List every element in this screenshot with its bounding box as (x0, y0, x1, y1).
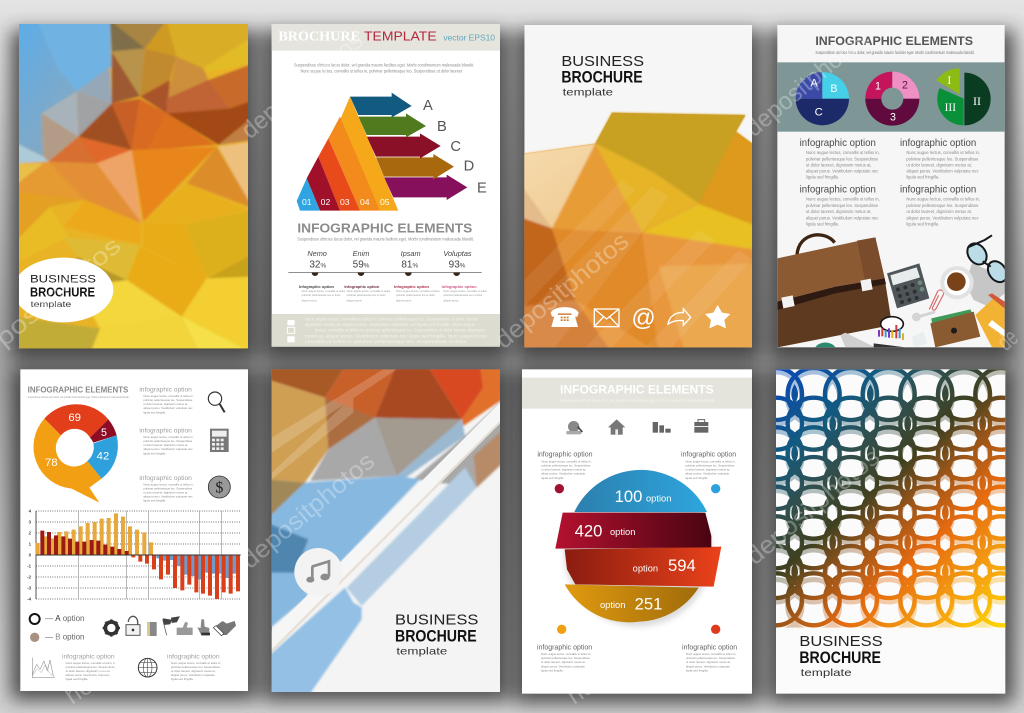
heading subtext: Suspendisse ultricies lacus dolor, vel gravida mauris facilisis eget. Morbi condimentum malesuada blandit. (560, 398, 715, 403)
watermarks: depositphotos (490, 227, 634, 355)
watermarks: hotos (562, 653, 627, 710)
icon: music note circle (294, 548, 342, 596)
four small options: aliquet purus (302, 298, 318, 302)
speech bubble donut chart: 69 (68, 412, 81, 424)
side option texts: pulvinar pellentesque leo. Suspendisse (143, 486, 193, 490)
brochure title: BUSINESS (395, 611, 478, 628)
four option blocks: infographic option (682, 644, 737, 651)
pyramid slabs: 02 (321, 197, 330, 207)
heading subtext: Suspendisse ultricies lacus dolor, vel gravida mauris facilisis eget. Morbi condimentum malesuada blandit. (28, 395, 130, 399)
four small options: aliquet purus (443, 298, 459, 302)
bar chart: 4 (29, 509, 32, 514)
four small options: pulvinar pellentesque leo ut dolor (347, 293, 386, 297)
panel: circular ribbon infographic (522, 369, 752, 694)
option blocks: infographic option (800, 138, 876, 149)
pie chart roman numerals: II (973, 94, 981, 108)
four option blocks: aliquet purus. Vestibulum vulputate (541, 472, 586, 476)
percent stats: Voluptas (443, 249, 472, 258)
four small options: Infographic option (442, 284, 477, 289)
intro text (294, 62, 474, 74)
four option blocks: aliquet purus. Vestibulum vulputate (686, 664, 730, 668)
option blocks (800, 138, 980, 226)
mini line chart (32, 658, 55, 678)
option blocks: infographic option (900, 185, 976, 196)
bottom option right: pulvinar pellentesque leo. Suspendisse (171, 665, 220, 669)
four option blocks: ligula sed fringilla. (686, 669, 709, 673)
pyramid slabs: 03 (340, 197, 350, 207)
percent stats: 32% (309, 260, 326, 271)
panel: orange polygon brochure (519, 25, 759, 353)
option blocks: pulvinar pellentesque leo. Suspendisse (806, 203, 879, 208)
option blocks: pulvinar pellentesque leo. Suspendisse (906, 203, 979, 208)
pie chart ABC (796, 72, 849, 125)
four option blocks: ligula sed fringilla. (685, 476, 708, 480)
bottom option right: aliquet purus. Vestibulum vulputate (171, 673, 215, 677)
four option blocks: aliquet purus. Vestibulum vulputate (541, 664, 585, 668)
icon: dollar coin: $ (215, 480, 223, 497)
bottom option left: ut dolor laoreet, dignissim metus at, (66, 669, 111, 673)
speech bubble donut chart: 5 (101, 427, 107, 439)
panel: pyramid brochure (272, 24, 500, 347)
icon: key (912, 311, 935, 321)
option blocks: ut dolor laoreet, dignissim metus at, (906, 162, 972, 167)
ribbon circle chart (555, 470, 721, 622)
bottom option right: ligula sed fringilla. (171, 677, 194, 681)
percent stats: 59% (353, 260, 370, 271)
option blocks: Nunc augue lectus, convallis ut tellus in, (806, 150, 880, 155)
four option blocks: ut dolor laoreet, dignissim metus at, (686, 660, 731, 664)
option blocks: aliquet purus. Vestibulum vulputate nec (906, 169, 979, 174)
speech bubble donut chart: 78 (45, 457, 58, 469)
four option blocks (537, 452, 737, 673)
watermarks: depositphotos (236, 447, 380, 575)
option blocks: pulvinar pellentesque leo. Suspendisse (906, 156, 979, 161)
four option blocks: pulvinar pellentesque leo. Suspendisse (685, 463, 735, 467)
brochure title: template (801, 668, 852, 679)
option blocks: ut dolor laoreet, dignissim metus at, (806, 162, 872, 167)
side option texts: aliquet purus. Vestibulum vulputate nec (143, 494, 193, 498)
four option blocks: pulvinar pellentesque leo. Suspendisse (686, 656, 735, 660)
four option blocks: ligula sed fringilla. (541, 669, 564, 673)
pyramid slabs (297, 97, 398, 211)
arrow letters: B (437, 119, 447, 135)
brochure title: BUSINESS (561, 53, 644, 70)
arrow letters (423, 98, 487, 196)
four small options (299, 284, 488, 302)
brochure title: template (396, 646, 448, 657)
icon: charts and papers (815, 317, 927, 347)
four option blocks: Nunc augue lectus, convallis ut tellus in, (686, 652, 736, 656)
ring shadow layer (776, 370, 1006, 628)
header title: TEMPLATE (364, 29, 437, 44)
icon: wallet (930, 309, 980, 347)
bottom option left: pulvinar pellentesque leo. Suspendisse (66, 665, 115, 669)
icon: telephone (551, 307, 579, 327)
icon: case (694, 420, 708, 433)
icon: envelope (594, 309, 619, 327)
side option texts: ut dolor laoreet, dignissim metus at, (143, 490, 188, 494)
cover title ellipse: BROCHURE (30, 285, 95, 300)
side option texts: Nunc augue lectus, convallis ut tellus in, (143, 394, 194, 398)
percent stats: 93% (449, 260, 466, 271)
brochure title (561, 53, 644, 99)
bottom option right: ut dolor laoreet, dignissim metus at, (171, 669, 216, 673)
speech bubble donut chart (33, 404, 118, 503)
icon: star (705, 305, 730, 328)
four small options: pulvinar pellentesque leo ut dolor (302, 293, 341, 297)
icon: paperclip (929, 290, 944, 310)
footer band: dignissim metus at, aliquet purus. Vestibulum vulputate nec ligula sed fringilla. Nunc augue (305, 322, 476, 327)
brochure title: BROCHURE (395, 626, 477, 645)
side option texts: ut dolor laoreet, dignissim metus at, (143, 443, 188, 447)
section subtext: Suspendisse ultricies lacus dolor, vel gravida mauris facilisis eget. Morbi condimentum malesuada blandit. (297, 236, 474, 241)
footer band: convallis ut tellus in, pulvinar pellentesque leo. Suspendisse ut dolor (305, 339, 467, 344)
bottom option right: Nunc augue lectus, convallis ut tellus in, (171, 661, 221, 665)
ribbon circle chart: 100 (615, 487, 642, 506)
four option blocks: infographic option (681, 452, 736, 459)
side option texts: Nunc augue lectus, convallis ut tellus in, (143, 482, 194, 486)
option blocks: aliquet purus. Vestibulum vulputate nec (806, 215, 878, 220)
brochure title: template (563, 88, 613, 99)
percent stats: 81% (401, 260, 418, 271)
cover title ellipse: template (31, 299, 72, 309)
legend (30, 614, 85, 642)
subtitle: Suspendisse ultricies lacus dolor, vel gravida mauris facilisis eget. Morbi condimentum malesuada blandit. (815, 50, 975, 55)
pyramid slabs: 01 (302, 197, 312, 207)
side option texts: ligula sed fringilla. (143, 410, 166, 414)
icon: briefcase (777, 235, 892, 347)
option blocks: Nunc augue lectus, convallis ut tellus in, (906, 150, 980, 155)
four small options: Infographic option (394, 284, 430, 289)
interlaced ring layer (776, 369, 1006, 628)
ribbon circle chart: option (610, 527, 635, 537)
side option texts (139, 387, 194, 503)
side option texts: ligula sed fringilla. (143, 499, 166, 503)
ribbon shadow (564, 479, 712, 627)
bottom option right (167, 654, 221, 681)
watermarks: depositphotos (740, 25, 873, 143)
brochure title: BUSINESS (799, 633, 883, 650)
four option blocks: pulvinar pellentesque leo. Suspendisse (541, 463, 591, 467)
icon: bar blocks (653, 422, 671, 433)
option blocks: aliquet purus. Vestibulum vulputate nec (806, 169, 878, 174)
option blocks: infographic option (800, 185, 876, 196)
pie chart ABC: C (815, 107, 823, 119)
four option blocks: aliquet purus. Vestibulum vulputate (685, 472, 730, 476)
heading: INFOGRAPHIC ELEMENTS (560, 383, 714, 397)
pie chart roman numerals (936, 68, 991, 125)
bottom option left: aliquet purus. Vestibulum vulputate (66, 673, 110, 677)
bar chart: -1 (27, 564, 32, 569)
bar chart: -2 (27, 575, 32, 580)
side option texts: ut dolor laoreet, dignissim metus at, (143, 402, 188, 406)
icon: calculator (887, 263, 929, 308)
header title: BROCHURE (278, 29, 360, 44)
four small options: Nunc augue lectus, convallis ut tellus (396, 289, 440, 293)
side option texts: aliquet purus. Vestibulum vulputate nec (143, 406, 193, 410)
four option blocks: infographic option (537, 452, 593, 459)
four small options: aliquet purus (347, 298, 363, 302)
percent stats (288, 249, 482, 276)
brochure title: BROCHURE (561, 68, 643, 87)
percent stats: Enim (353, 249, 369, 258)
four small options: Nunc augue lectus, convallis ut tellus (347, 289, 391, 293)
bar chart: 2 (29, 531, 32, 536)
icon: dollar coin (208, 476, 230, 498)
pie chart ABC: A (810, 78, 818, 90)
section heading: INFOGRAPHIC ELEMENTS (297, 221, 472, 235)
donut chart 123 (865, 72, 919, 126)
cover title ellipse: BUSINESS (30, 274, 97, 286)
bottom option right: infographic option (167, 654, 220, 661)
option blocks: ligula sed fringilla. (806, 175, 839, 180)
option blocks: pulvinar pellentesque leo. Suspendisse (806, 156, 879, 161)
bar chart: -4 (27, 597, 32, 602)
ribbon circle chart: 594 (668, 556, 696, 575)
percent stats: Nemo (307, 249, 327, 258)
ribbon circle chart: option (646, 493, 671, 503)
four option blocks: Nunc augue lectus, convallis ut tellus in, (685, 459, 736, 463)
footer band: Nunc augue lectus, convallis ut tellus in, pulvinar pellentesque leo. Suspendisse ut dolor laoreet (305, 317, 479, 322)
brochure title: BROCHURE (799, 648, 881, 667)
speech bubble donut chart: 42 (97, 450, 109, 462)
pie chart ABC: B (830, 83, 837, 95)
bar chart: -3 (27, 586, 32, 591)
option blocks: ligula sed fringilla. (806, 221, 839, 226)
side option texts: infographic option (139, 387, 192, 394)
pie band (777, 62, 1005, 132)
four small options: pulvinar pellentesque leo ut dolor (396, 293, 435, 297)
four option blocks: ut dolor laoreet, dignissim metus at, (541, 467, 586, 471)
option blocks: ligula sed fringilla. (906, 175, 939, 180)
panel: blue and brown diagonal brochure (267, 364, 505, 696)
bottom option left: Nunc augue lectus, convallis ut tellus in, (66, 661, 116, 665)
side option texts: pulvinar pellentesque leo. Suspendisse (143, 439, 193, 443)
four small options: Nunc augue lectus, convallis ut tellus (443, 289, 488, 293)
icon: house (608, 419, 625, 435)
side option texts: pulvinar pellentesque leo. Suspendisse (143, 398, 193, 402)
icon: calculator (210, 429, 229, 452)
four small options: pulvinar pellentesque leo ut dolor (443, 293, 482, 297)
panel: interlaced rings brochure (776, 369, 1006, 694)
four option blocks: pulvinar pellentesque leo. Suspendisse (541, 656, 590, 660)
ring knots (792, 386, 985, 580)
option blocks: ligula sed fringilla. (906, 221, 939, 226)
legend: — A option (45, 614, 85, 623)
ribbon circle chart: 420 (575, 522, 602, 541)
arrow letters: A (423, 98, 433, 114)
pyramid slabs: 04 (360, 197, 370, 207)
option blocks: ut dolor laoreet, dignissim metus at, (806, 209, 872, 214)
side option texts: Nunc augue lectus, convallis ut tellus in, (143, 435, 194, 439)
four option blocks: ligula sed fringilla. (541, 476, 564, 480)
icon: folder (975, 293, 1005, 347)
side option texts: infographic option (139, 475, 192, 482)
icon: share arrow (668, 309, 691, 325)
bar chart: 1 (29, 542, 32, 547)
side option texts: ligula sed fringilla. (143, 451, 166, 455)
arrow letters: C (450, 139, 461, 155)
four small options: Nunc augue lectus, convallis ut tellus (302, 289, 346, 293)
pyramid slabs: 05 (380, 197, 390, 207)
donut chart 123: 1 (875, 80, 881, 92)
bottom option left (62, 654, 116, 681)
ribbon circle chart: 251 (635, 594, 662, 613)
four small options: Infographic option (299, 284, 335, 289)
bar chart (27, 509, 241, 602)
bar chart: 3 (29, 520, 32, 525)
panel: donut and bar chart page (20, 369, 248, 691)
footer band: metus at, aliquet purus. Vestibulum vulputate nec ligula sed fringilla. Nunc augue lectus (305, 333, 487, 338)
pie chart roman numerals: III (945, 102, 956, 114)
four option blocks: ut dolor laoreet, dignissim metus at, (541, 660, 586, 664)
icon: magnifier (208, 392, 225, 412)
header title: vector EPS10 (443, 33, 495, 43)
option blocks: Nunc augue lectus, convallis ut tellus in, (906, 197, 980, 202)
pie chart roman numerals: I (947, 73, 951, 87)
watermarks: depositphotos (236, 27, 369, 145)
watermarks: depositphotos (741, 443, 885, 571)
four option blocks: infographic option (537, 644, 592, 651)
donut chart 123: 2 (902, 80, 908, 92)
intro text: Suspendisse ultricies lacus dolor, vel gravida mauris facilisis eget. Morbi condimentum malesuada blandit. (294, 62, 474, 67)
icon: glasses (966, 234, 1005, 284)
bar chart: 0 (29, 553, 32, 558)
icon: coffee cup (940, 266, 974, 299)
heading: INFOGRAPHIC ELEMENTS (28, 386, 129, 395)
footer band (272, 314, 500, 347)
panel: infographic with pies and briefcase (777, 25, 1011, 347)
icon: at sign: @ (631, 305, 656, 332)
side option texts: infographic option (139, 428, 192, 435)
brochure title (395, 611, 478, 657)
watermarks: hotos (60, 653, 125, 710)
ribbon circle chart: option (633, 564, 658, 574)
bottom option left: ligula sed fringilla. (66, 677, 88, 681)
four option blocks: ut dolor laoreet, dignissim metus at, (685, 467, 730, 471)
four option blocks: Nunc augue lectus, convallis ut tellus in, (541, 459, 592, 463)
four small options: aliquet purus (396, 298, 412, 302)
legend: — B option (45, 632, 85, 641)
ribbon circle chart: option (600, 600, 625, 610)
four option blocks: Nunc augue lectus, convallis ut tellus in, (541, 652, 591, 656)
arrow letters: E (477, 180, 487, 196)
option blocks: Nunc augue lectus, convallis ut tellus in, (806, 197, 880, 202)
option blocks: infographic option (900, 138, 976, 149)
side option texts: aliquet purus. Vestibulum vulputate nec (143, 447, 193, 451)
title: INFOGRAPHIC ELEMENTS (815, 34, 973, 48)
panel: yellow polygon cover (13, 20, 253, 353)
option blocks: ut dolor laoreet, dignissim metus at, (906, 209, 972, 214)
footer band: lectus, convallis ut tellus in, pulvinar pellentesque leo. Suspendisse ut dolor laoreet dignissim (315, 328, 485, 333)
percent stats: Ipsam (401, 249, 421, 258)
bottom option left: infographic option (62, 654, 115, 661)
brochure title (799, 633, 883, 679)
icon: newspaper (969, 264, 1004, 306)
four small options: Infographic option (344, 284, 380, 289)
header title (278, 29, 495, 44)
pyramid arrows (350, 93, 467, 200)
arrow letters: D (464, 159, 474, 175)
intro text: Nunc augue lectus, convallis ut tellus in, pulvinar pellentesque leo. Suspendisse ut dolor laoreet (300, 69, 463, 74)
icon: person search (566, 421, 582, 434)
option blocks: aliquet purus. Vestibulum vulputate nec (906, 215, 979, 220)
icon row: business symbols (103, 616, 236, 637)
icon: globe (138, 658, 157, 677)
colored dots (555, 484, 720, 634)
donut chart 123: 3 (890, 112, 896, 124)
cover title ellipse (13, 258, 113, 322)
